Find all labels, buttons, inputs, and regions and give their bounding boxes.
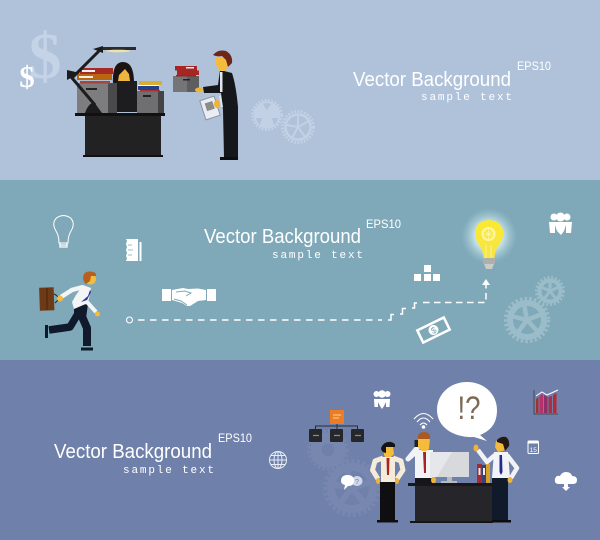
icon: background gears (309, 431, 379, 515)
carried box (173, 66, 199, 92)
icon: outline light bulb (54, 216, 73, 247)
shirt (61, 285, 96, 312)
icon: banknote (416, 316, 451, 344)
heading: Vector Background (54, 441, 212, 463)
computer monitor (430, 452, 469, 483)
panel: bottom banner (0, 360, 600, 540)
speech bubble: !? (458, 390, 480, 426)
clipboard (200, 96, 220, 120)
desk with clerk (67, 46, 165, 157)
desk lamp (67, 46, 136, 113)
icon: team of people (549, 212, 572, 235)
icon: wifi signal (414, 414, 433, 429)
icon: banknote: $ (429, 325, 438, 336)
briefcase (39, 287, 58, 311)
legs (46, 304, 93, 349)
head (83, 271, 96, 284)
icon: handshake (162, 288, 216, 306)
icon: team of people (374, 390, 390, 409)
heading: Vector Background (204, 226, 361, 248)
icon: calendar: 15 (530, 447, 537, 454)
stacked books (77, 68, 162, 92)
icon: notebook and pencil (126, 239, 142, 261)
icon: chat bubbles (341, 475, 362, 490)
subheading: sample text (123, 465, 214, 477)
panel: middle banner (0, 180, 600, 360)
icon: chat bubbles: ? (355, 479, 359, 486)
org chart (309, 410, 364, 442)
icon: calendar (528, 441, 538, 454)
icon: bar chart (534, 390, 558, 414)
speech bubble (437, 382, 497, 441)
clerk (113, 62, 137, 112)
desk (75, 113, 165, 157)
file boxes (77, 83, 164, 113)
icon: large dollar sign: $ (28, 20, 62, 93)
icon: globe (270, 452, 286, 468)
dashed path (126, 279, 490, 323)
man body (203, 70, 238, 160)
icon: small dollar sign: $ (19, 59, 35, 94)
standing man with box (173, 50, 238, 160)
version tag: EPS10 (366, 217, 401, 231)
hand (195, 88, 203, 92)
front desk (408, 483, 495, 523)
version tag: EPS10 (517, 59, 551, 73)
icon: gears (252, 100, 314, 142)
icon: gears (506, 278, 564, 342)
subheading: sample text (272, 250, 363, 262)
phone businessman (408, 432, 436, 484)
icon: cloud download (555, 472, 577, 491)
panel: top banner (0, 0, 600, 180)
binders (477, 464, 490, 483)
subheading: sample text (421, 92, 512, 104)
left businessman (372, 442, 403, 522)
icon: org blocks (414, 265, 440, 281)
hands (57, 296, 100, 316)
heading: Vector Background (353, 69, 511, 91)
tie (81, 290, 91, 302)
version tag: EPS10 (218, 431, 252, 445)
right businessman (474, 437, 517, 522)
man head (213, 50, 232, 71)
icon: glowing light bulb (461, 208, 517, 269)
runner with briefcase (39, 271, 100, 349)
